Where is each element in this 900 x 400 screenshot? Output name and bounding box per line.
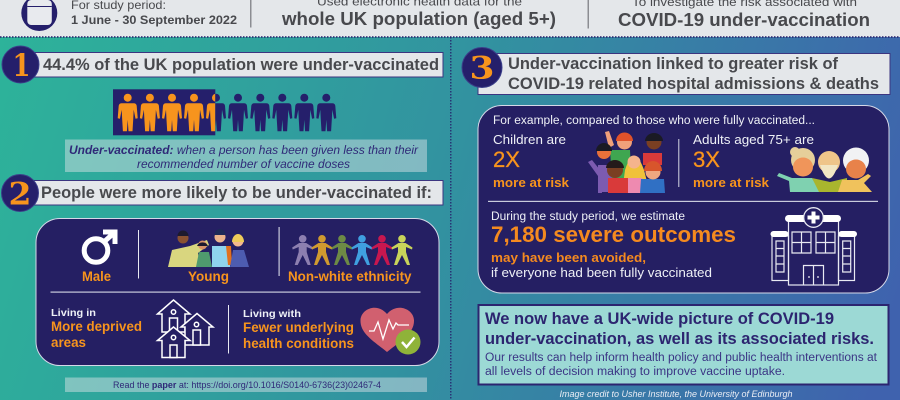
illustration: young people [168, 229, 249, 267]
icon: houses [158, 300, 213, 358]
label: young: Young [188, 269, 229, 284]
heading: section 1: 1 [12, 48, 30, 84]
stat: severe outcomes: may have been avoided, [491, 250, 646, 265]
icon: calendar [21, 0, 57, 31]
image credit: Image credit to Usher Institute, the University of Edinburgh [560, 389, 792, 399]
heading: section 1 [2, 46, 443, 84]
heading: section 3: 3 [470, 50, 494, 86]
text: deprived areas: Living in [51, 307, 96, 319]
aim: COVID-19 under-vaccination [618, 10, 870, 30]
heading: section 2: 2 [8, 176, 32, 212]
data used [281, 0, 556, 29]
definition: recommended number of vaccine doses [137, 159, 350, 171]
stat: severe outcomes [491, 211, 736, 280]
study period: 1 June - 30 September 2022 [71, 13, 237, 27]
conclusion box: We now have a UK-wide picture of COVID-19 [485, 310, 834, 328]
text: deprived areas [51, 307, 142, 350]
illustration: children [588, 131, 665, 193]
heading: section 3 [462, 48, 890, 94]
aim [618, 0, 870, 30]
stat: children [493, 132, 570, 190]
header strip [0, 0, 900, 36]
illustration: chain of people [292, 235, 412, 265]
stat: severe outcomes: if everyone had been fully vaccinated [491, 265, 712, 280]
stat: children: more at risk [493, 175, 570, 190]
paper link: Read the paper at: https://doi.org/10.1016/S0140-6736(23)02467-4 [113, 380, 381, 390]
text: deprived areas: areas [51, 335, 86, 350]
conclusion box [478, 305, 888, 384]
text: health conditions: Fewer underlying [243, 320, 354, 335]
heading: section 1: 44.4% of the UK population were under-vaccinated [43, 56, 439, 74]
stat: adults: more at risk [693, 175, 770, 190]
illustration: older adults [777, 147, 872, 192]
stat: adults [693, 132, 814, 190]
heading: section 2: People were more likely to be under-vaccinated if: [41, 184, 432, 202]
heading: section 3: COVID-19 related hospital admissions & deaths [508, 75, 879, 93]
pictogram: 44.4% of people [113, 89, 336, 135]
definition [65, 140, 427, 172]
data used: whole UK population (aged 5+) [281, 9, 556, 29]
label: male: Male [82, 269, 111, 284]
text: health conditions: Living with [243, 308, 301, 320]
text: health conditions: health conditions [243, 336, 354, 351]
icon: hospital [770, 208, 857, 285]
stat: children: Children are [493, 132, 566, 147]
panel: risk factors [36, 218, 439, 366]
stat: adults: 3X [693, 147, 720, 172]
heading: section 3: Under-vaccination linked to greater risk of [508, 55, 839, 73]
icon: heart with check [360, 308, 420, 354]
paper link [65, 378, 427, 392]
stat: adults: Adults aged 75+ are [693, 132, 814, 147]
conclusion box: Our results can help inform health policy and public health interventions at [485, 352, 878, 364]
stat: children: 2X [493, 147, 520, 172]
intro text: For example, compared to those who were fully vaccinated... [493, 115, 815, 127]
study period [71, 0, 237, 27]
icon: male symbol [84, 232, 115, 262]
label: ethnicity: Non-white ethnicity [288, 269, 412, 284]
stat: severe outcomes: During the study period, we estimate [491, 211, 685, 223]
text: health conditions [243, 308, 354, 351]
conclusion box: under-vaccination, as well as its associated risks. [485, 330, 874, 348]
panel: greater risk [478, 106, 889, 293]
text: deprived areas: More deprived [51, 319, 142, 334]
stat: severe outcomes: 7,180 severe outcomes [491, 222, 736, 247]
heading: section 2 [2, 174, 443, 212]
definition: Under-vaccinated: when a person has been given less than their [69, 145, 419, 157]
conclusion box: all levels of decision making to improve vaccine uptake. [485, 366, 785, 378]
